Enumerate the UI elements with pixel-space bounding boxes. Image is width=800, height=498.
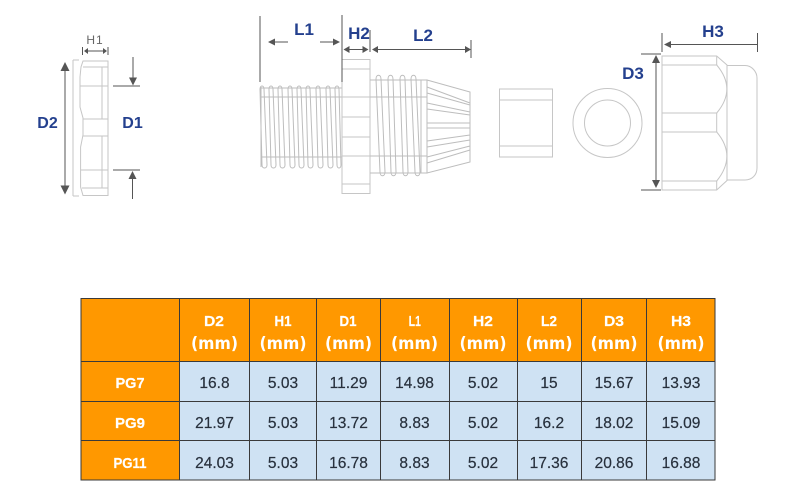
arrow: L2 dimension xyxy=(370,30,471,58)
row: PG9 values: 18.02 xyxy=(595,415,633,432)
row: PG9 values: 16.2 xyxy=(534,415,564,432)
arrow: D2 dimension xyxy=(60,62,70,194)
row: PG11 values: 5.03 xyxy=(268,455,298,472)
column headers: (mm) xyxy=(526,334,572,353)
icon: seal ring xyxy=(573,88,642,158)
column headers: (mm) xyxy=(191,334,238,353)
column headers: D1 xyxy=(340,313,356,330)
row: PG9 values: 5.02 xyxy=(468,415,498,432)
row: PG9 values: 8.83 xyxy=(399,415,430,432)
column headers: L1 xyxy=(409,313,421,330)
column headers: (mm) xyxy=(460,334,506,353)
row: PG11 values: 24.03 xyxy=(195,455,234,472)
table grid xyxy=(81,298,715,480)
row: PG9 values: 13.72 xyxy=(329,415,368,432)
label: H1: H1 xyxy=(86,33,104,47)
label: H2: H2 xyxy=(348,24,370,43)
table: dimensions by PG size xyxy=(81,298,715,480)
arrow: H2 dimension xyxy=(344,46,368,53)
column headers: L2 xyxy=(541,313,557,330)
column headers: D2 xyxy=(204,313,224,330)
icon: seal cylinder xyxy=(500,89,552,157)
column headers: H2 xyxy=(473,313,493,330)
icon: tapered fingers xyxy=(427,80,470,173)
column headers: D3 xyxy=(604,313,624,330)
row: PG7 values: 5.02 xyxy=(468,375,498,392)
label: D2: D2 xyxy=(37,115,58,132)
column headers: H1 xyxy=(274,313,292,330)
column headers: H3 xyxy=(671,313,691,330)
row: PG11 values: 16.78 xyxy=(329,455,368,472)
column headers: (mm) xyxy=(260,334,306,353)
row: PG7 values: 11.29 xyxy=(330,375,367,392)
row: PG11 values: 17.36 xyxy=(530,455,568,472)
column headers: (mm) xyxy=(658,334,704,353)
row: PG7 values: 16.8 xyxy=(199,375,230,392)
row: PG7 values xyxy=(199,375,700,392)
row: PG11 values: 16.88 xyxy=(662,455,700,472)
panel: dome nut side view xyxy=(622,22,758,190)
row labels: PG11 xyxy=(114,455,146,472)
row: PG9 values: 21.97 xyxy=(195,415,234,432)
panel: end cap side view xyxy=(37,33,143,199)
label: L1: L1 xyxy=(294,20,314,39)
row: PG11 values: 20.86 xyxy=(595,455,633,472)
panel: gland body side view xyxy=(260,15,471,194)
arrow: D1 top xyxy=(113,57,140,86)
data cells background xyxy=(180,362,715,480)
row: PG9 values xyxy=(195,415,700,432)
row: PG7 values: 15 xyxy=(540,375,558,392)
row: PG7 values: 13.93 xyxy=(662,375,700,392)
row: PG9 values: 15.09 xyxy=(662,415,700,432)
row labels: PG9 xyxy=(115,415,145,432)
row: PG7 values: 14.98 xyxy=(395,375,434,392)
row: PG7 values: 5.03 xyxy=(268,375,298,392)
row: PG7 values: 15.67 xyxy=(595,375,633,392)
arrow: H1 dimension xyxy=(82,47,108,55)
column headers xyxy=(191,313,704,353)
icon: dome nut xyxy=(662,56,757,190)
arrow: D3 dimension xyxy=(641,54,661,190)
row: PG9 values: 5.03 xyxy=(268,415,298,432)
column headers: (mm) xyxy=(590,334,638,353)
row: PG11 values: 5.02 xyxy=(468,455,498,472)
arrow: D1 bottom xyxy=(113,170,140,199)
arrow: L1 dimension xyxy=(260,15,342,82)
header row background xyxy=(81,298,715,362)
column headers: (mm) xyxy=(391,334,438,353)
row: PG11 values: 8.83 xyxy=(399,455,430,472)
label: D3: D3 xyxy=(622,64,644,83)
row labels background xyxy=(81,362,180,480)
label: H3: H3 xyxy=(702,22,724,41)
row labels: PG7 xyxy=(116,375,144,392)
label: D1: D1 xyxy=(122,115,143,132)
icon: compression thread xyxy=(370,75,427,176)
arrow: H3 dimension xyxy=(662,33,758,52)
column headers: (mm) xyxy=(325,334,372,353)
icon: cap drawing xyxy=(73,60,108,196)
row labels xyxy=(114,375,146,472)
row: PG11 values xyxy=(195,455,700,472)
label: L2: L2 xyxy=(413,26,433,45)
icon: male thread xyxy=(260,86,342,168)
icon: hex flange xyxy=(342,60,370,194)
